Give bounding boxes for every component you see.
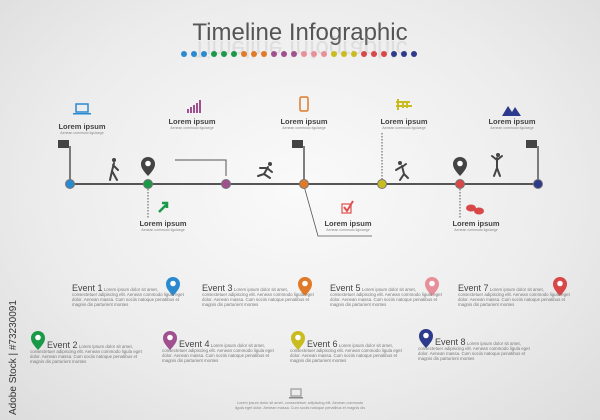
timeline line [70,183,538,185]
nodes [66,180,542,188]
lorem labels: Lorem ipsum [452,219,500,228]
icons [73,97,521,214]
lorem labels: Lorem ipsum [380,117,428,126]
text: Aenean commodo ligulaege [382,126,426,130]
side credit: Adobe Stock | #73230091 [8,300,19,415]
dots row [181,51,417,57]
text: Event 7 Lorem ipsum dolor sit amet, consectetuer adipiscing elit. Aenean commodo ligula eget dolor. Aenean massa. Cum sociis natoque penatibus et magnis dis parturient montes [458,283,570,307]
lorem labels: Lorem ipsum [280,117,328,126]
text: Event 2 Lorem ipsum dolor sit amet, consectetuer adipiscing elit. Aenean commodo ligula eget dolor. Aenean massa. Cum sociis natoque penatibus et magnis dis parturient montes [30,340,142,364]
text: Aenean commodo ligulaege [170,126,214,130]
title: Timeline Infographic [192,35,408,62]
text: Event 6 Lorem ipsum dolor sit amet, consectetuer adipiscing elit. Aenean commodo ligula eget dolor. Aenean massa. Cum sociis natoque penatibus et magnis dis parturient montes [290,339,402,363]
bottom laptop [289,389,303,398]
text: Aenean commodo ligulaege [454,228,498,232]
event pins [31,277,567,350]
text: Aenean commodo ligulaege [282,126,326,130]
lorem labels: Lorem ipsum [139,219,187,228]
text: Event 3 Lorem ipsum dolor sit amet, consectetuer adipiscing elit. Aenean commodo ligula eget dolor. Aenean massa. Cum sociis natoque penatibus et magnis dis parturient montes [202,283,314,307]
lorem labels: Lorem ipsum [168,117,216,126]
lorem labels: Lorem ipsum [488,117,536,126]
text: Aenean commodo ligulaege [60,131,104,135]
title: Timeline Infographic [192,19,408,46]
flags [58,140,537,148]
text: Event 4 Lorem ipsum dolor sit amet, consectetuer adipiscing elit. Aenean commodo ligula eget dolor. Aenean massa. Cum sociis natoque penatibus et magnis dis parturient montes [162,339,274,363]
text: Event 5 Lorem ipsum dolor sit amet, consectetuer adipiscing elit. Aenean commodo ligula eget dolor. Aenean massa. Cum sociis natoque penatibus et magnis dis parturient montes [330,283,442,307]
lorem labels: Lorem ipsum [58,122,106,131]
title [192,19,408,62]
figures [110,153,502,180]
lorem labels: Lorem ipsum [324,219,372,228]
connectors [70,133,538,236]
text: ligula eget dolor. Aenean massa. Cum sociis natoque penatibus et magnis dis [235,406,365,410]
text: Aenean commodo ligulaege [490,126,534,130]
events: Event 1 Lorem ipsum dolor sit amet, consectetuer adipiscing elit. Aenean commodo ligula eget dolor. Aenean massa. Cum sociis natoque penatibus et magnis dis parturient montes [72,283,184,307]
text: Aenean commodo ligulaege [326,228,370,232]
gray pins on line [141,157,467,176]
text: Aenean commodo ligulaege [141,228,185,232]
text: Event 8 Lorem ipsum dolor sit amet, consectetuer adipiscing elit. Aenean commodo ligula eget dolor. Aenean massa. Cum sociis natoque penatibus et magnis dis parturient montes [418,337,530,361]
text: Lorem ipsum dolor sit amet, consectetuer adipiscing elit. Aenean commodo [237,401,363,405]
lorem labels [58,117,536,228]
